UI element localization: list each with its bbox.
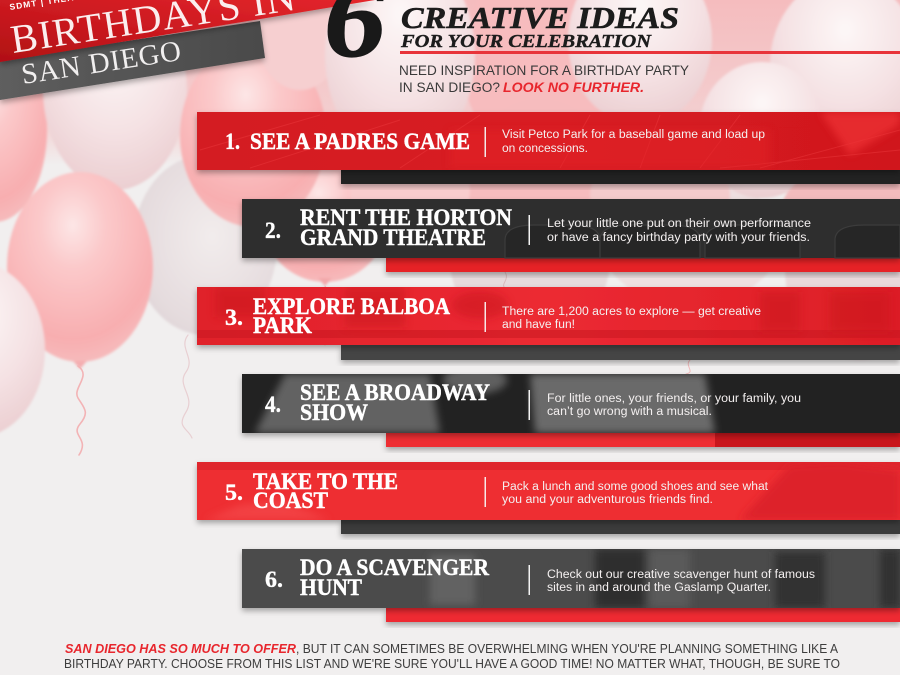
title: EXPLORE BALBOA — [253, 294, 450, 319]
grey banner strip — [0, 21, 265, 100]
footer text: SAN DIEGO HAS SO MUCH TO OFFER — [65, 642, 296, 656]
red banner strip — [0, 0, 375, 62]
description — [502, 129, 765, 155]
panel: idea 4 — [242, 366, 900, 447]
title: HUNT — [300, 575, 362, 600]
intro text: IN SAN DIEGO? — [399, 80, 500, 95]
title: RENT THE HORTON — [300, 205, 512, 230]
title — [300, 555, 489, 600]
number: 6. — [265, 567, 283, 592]
number: 1. — [225, 129, 240, 154]
title — [253, 294, 450, 338]
description: sites in and around the Gaslamp Quarter. — [547, 582, 771, 594]
intro text — [399, 63, 689, 95]
title: PARK — [253, 313, 312, 338]
number: 2. — [265, 218, 281, 243]
banner subtitle: SAN DIEGO — [19, 35, 183, 91]
panel: idea 6 — [242, 549, 900, 622]
description: Check out our creative scavenger hunt of famous — [547, 569, 815, 581]
title — [300, 205, 512, 250]
description: Pack a lunch and some good shoes and see what — [502, 481, 769, 493]
number: 3. — [225, 305, 243, 330]
description: can’t go wrong with a musical. — [547, 406, 712, 418]
heading — [324, 0, 900, 81]
description — [502, 481, 769, 506]
description: you and your adventurous friends find. — [502, 494, 713, 506]
description: on concessions. — [502, 143, 588, 155]
description: Let your little one put on their own performance — [547, 218, 811, 230]
heading rule — [400, 51, 900, 54]
title: GRAND THEATRE — [300, 225, 486, 250]
description: Visit Petco Park for a baseball game and load up — [502, 129, 765, 141]
number: 4. — [265, 392, 281, 417]
description — [547, 569, 815, 594]
description: or have a fancy birthday party with your friends. — [547, 232, 810, 244]
description: For little ones, your friends, or your family, you — [547, 393, 801, 405]
heading line 2: FOR YOUR CELEBRATION — [400, 31, 652, 51]
description — [547, 393, 801, 418]
title: SEE A BROADWAY — [300, 380, 490, 405]
panel: idea 2 — [242, 199, 900, 272]
footer text: BIRTHDAY PARTY. CHOOSE FROM THIS LIST AND WE'RE SURE YOU'LL HAVE A GOOD TIME! NO MATTER WHAT, THOUGH, BE SURE TO — [64, 657, 840, 671]
description — [502, 306, 761, 331]
panel: idea 3 — [197, 287, 900, 360]
title: TAKE TO THE — [253, 469, 398, 494]
title: DO A SCAVENGER — [300, 555, 489, 580]
panel: idea 5 — [197, 462, 900, 534]
intro text: NEED INSPIRATION FOR A BIRTHDAY PARTY — [399, 63, 689, 78]
banner: birthdays in san diego — [0, 0, 375, 100]
description — [547, 218, 811, 244]
title — [300, 380, 490, 425]
footer text — [64, 642, 840, 671]
description: There are 1,200 acres to explore — get creative — [502, 306, 761, 318]
number: 5. — [225, 480, 243, 505]
intro text: LOOK NO FURTHER. — [503, 80, 644, 95]
balloons cluster — [0, 0, 900, 438]
title: SHOW — [300, 400, 368, 425]
heading line 1: CREATIVE IDEAS — [401, 0, 679, 35]
title: SEE A PADRES GAME — [250, 129, 470, 154]
panel: idea 1 — [197, 112, 900, 184]
description: and have fun! — [502, 319, 575, 331]
title — [253, 469, 398, 513]
title: COAST — [253, 488, 328, 513]
balloon strings — [77, 272, 690, 455]
footer text: , BUT IT CAN SOMETIMES BE OVERWHELMING WHEN YOU'RE PLANNING SOMETHING LIKE A — [296, 642, 839, 656]
